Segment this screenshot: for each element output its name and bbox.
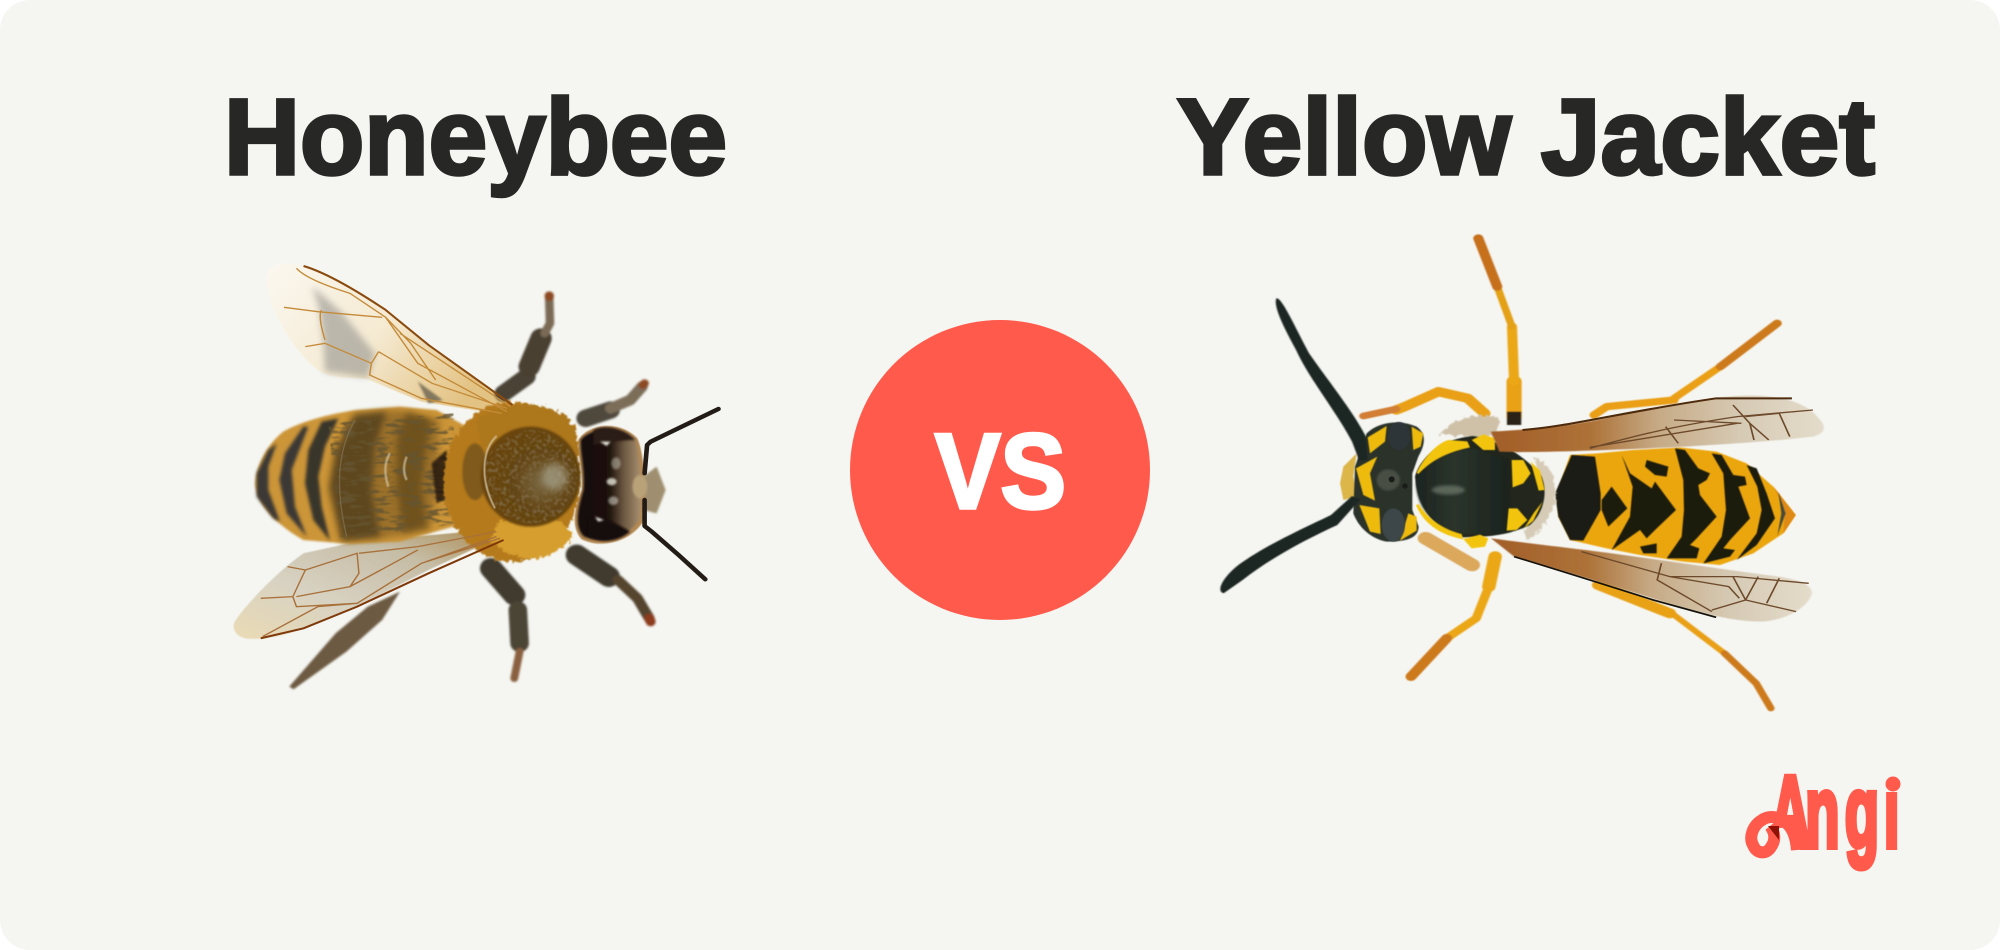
thorax yellow marks — [1416, 434, 1545, 548]
logo A gap — [1766, 826, 1794, 851]
logo i dot — [1886, 776, 1900, 792]
Angi logo — [1751, 755, 1904, 869]
head highlights — [595, 442, 621, 522]
bee legs and wings — [234, 263, 651, 689]
abdomen — [255, 407, 480, 544]
upper wing fill — [266, 263, 512, 414]
black bands — [1602, 448, 1775, 563]
head yellow marks — [1356, 426, 1423, 541]
thorax fuzz — [443, 402, 580, 562]
wing veins — [261, 266, 512, 638]
heading: Honeybee: Honeybee — [224, 76, 727, 197]
badge circle — [850, 320, 1150, 620]
thorax and head — [443, 402, 666, 562]
left scale — [462, 443, 488, 500]
thorax body — [1415, 436, 1545, 537]
compound eyes — [1388, 422, 1410, 450]
wasp upper wing — [1491, 396, 1824, 452]
wasp thorax and head — [1340, 415, 1556, 548]
VS label: VS — [935, 411, 1066, 531]
antennae — [645, 409, 719, 579]
logo wordmark: Angi — [1770, 755, 1899, 869]
logo ribbon fold — [1768, 826, 1779, 840]
hind leg — [289, 592, 400, 689]
wasp antennae — [1220, 298, 1368, 593]
wasp legs — [1363, 238, 1777, 708]
thorax dome — [481, 427, 581, 527]
heading: Yellow Jacket: Yellow Jacket — [1177, 76, 1875, 197]
wasp lower wing — [1491, 538, 1812, 622]
lower wing fill — [234, 529, 504, 639]
tan hairs — [1440, 415, 1500, 437]
head body — [1353, 422, 1424, 542]
VS badge — [850, 320, 1150, 620]
bee head — [633, 467, 666, 513]
honeybee illustration — [234, 263, 719, 689]
wasp abdomen — [1555, 447, 1796, 565]
dark base — [1555, 455, 1601, 541]
logo i dot mask — [1882, 768, 1904, 792]
yellow jacket illustration — [1220, 238, 1824, 708]
legs — [491, 296, 651, 678]
logo ribbon loop — [1751, 817, 1797, 852]
